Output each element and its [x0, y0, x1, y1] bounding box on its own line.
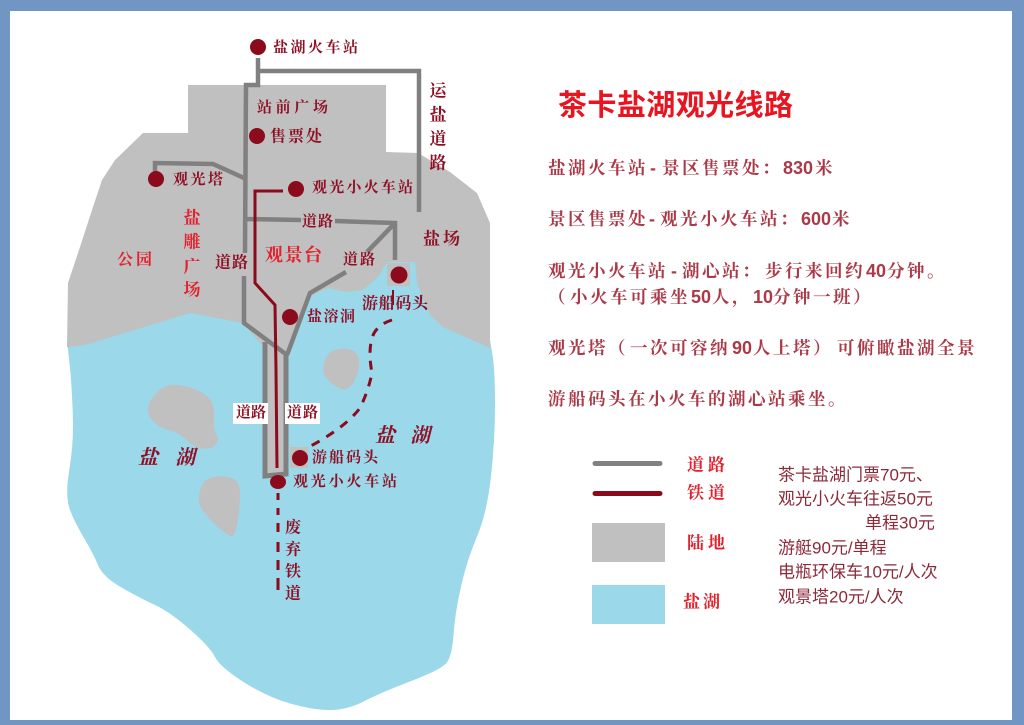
legend: land	[592, 523, 725, 562]
route information text: 830	[783, 158, 813, 178]
station dots	[148, 39, 408, 489]
map labels	[117, 38, 460, 602]
map labels: 道路	[343, 250, 375, 268]
south dock land	[290, 447, 308, 468]
map labels: 盐场	[423, 228, 460, 248]
causeway road label left: 道路	[236, 403, 266, 421]
route information text: 米	[832, 209, 852, 229]
route information text: 50	[691, 287, 711, 307]
ticket prices: 观景塔20元/人次	[778, 588, 904, 606]
ticket prices: 单程30元	[865, 514, 935, 532]
route information text: 600	[801, 209, 831, 229]
map labels: 盐 湖	[138, 446, 199, 469]
map labels: 游船码头	[312, 448, 380, 466]
map labels: 盐溶洞	[307, 307, 355, 325]
ticket prices: 观光小火车往返50元	[778, 490, 933, 508]
railway	[255, 191, 283, 468]
map labels: 场	[184, 280, 200, 300]
map labels: 盐	[184, 208, 202, 228]
island west	[148, 385, 218, 449]
route information text: 90	[732, 338, 752, 358]
map labels: 道路	[215, 252, 248, 272]
ticket prices: 电瓶环保车10元/人次	[778, 562, 938, 582]
map	[67, 38, 495, 710]
route information text: 小火车可乘坐	[570, 287, 690, 307]
map labels: 道路	[302, 212, 333, 230]
map labels: 雕	[184, 232, 200, 252]
route information text: 人上塔）	[753, 338, 833, 358]
map labels: 铁	[285, 562, 301, 580]
map labels: 游船码头	[362, 294, 430, 312]
route information text: 盐湖火车站	[548, 158, 648, 178]
island east	[323, 348, 359, 389]
route information text: 步行来回约	[765, 261, 865, 281]
map labels: 公园	[117, 250, 152, 268]
map labels: 弃	[285, 540, 301, 558]
ticket prices	[778, 466, 938, 606]
map labels: 废	[285, 518, 301, 536]
route information text: 观光小火车站	[548, 261, 668, 281]
causeway	[265, 342, 286, 476]
route information text: 米	[815, 158, 835, 178]
map labels: 道	[430, 128, 446, 148]
route information text: -	[650, 158, 656, 178]
map labels: 道	[285, 584, 301, 602]
route information text: -	[671, 261, 677, 281]
route information text: 游船码头在小火车的湖心站乘坐。	[548, 389, 848, 409]
island south-west	[199, 476, 240, 536]
causeway road label right: 道路	[287, 403, 318, 421]
boat route	[307, 320, 392, 448]
map labels: 运	[430, 82, 448, 100]
lake-centre dock land	[387, 263, 410, 286]
boat route at pier	[392, 290, 394, 305]
route information text: 分钟一班）	[773, 287, 873, 307]
route information text: （	[548, 287, 568, 307]
map labels: 盐	[430, 104, 448, 124]
lake	[67, 250, 495, 710]
route information text: 观光塔	[548, 338, 608, 358]
legend: road: 道路	[687, 454, 725, 474]
legend: road	[595, 454, 725, 474]
land	[67, 85, 490, 358]
roads	[155, 58, 419, 476]
route information text: 分钟。	[887, 261, 947, 281]
map labels: 观光小火车站	[293, 472, 397, 490]
route information text: 人，	[712, 287, 752, 308]
legend: salt lake: 盐湖	[683, 592, 720, 612]
route information text: 观光小火车站：	[660, 209, 800, 229]
map labels: 观光小火车站	[312, 178, 413, 196]
route information text: 湖心站：	[682, 261, 762, 281]
route information text: 10	[753, 287, 773, 307]
route information text: 可俯瞰盐湖全景	[837, 338, 977, 358]
ticket prices: 游艇90元/单程	[778, 538, 887, 558]
map labels: 观景台	[265, 245, 323, 265]
route information text: 景区售票处	[548, 209, 648, 229]
route information text	[548, 158, 977, 409]
map labels: 盐湖火车站	[273, 38, 358, 56]
route information text: （	[608, 338, 628, 358]
map labels: 站前广场	[257, 98, 328, 116]
causeway road label left	[233, 403, 268, 424]
legend: railway	[595, 482, 725, 502]
map labels: 观光塔	[173, 170, 223, 188]
route information text: 景区售票处：	[662, 158, 782, 178]
legend: railway: 铁道	[687, 482, 725, 502]
abandoned railway dashes	[276, 493, 280, 590]
legend	[592, 454, 725, 624]
map labels: 广	[184, 258, 200, 276]
map labels: 盐 湖	[375, 424, 434, 447]
route information text: 40	[866, 261, 886, 281]
route information text: 一次可容纳	[630, 338, 730, 358]
causeway road label right	[285, 403, 320, 424]
map labels: 售票处	[270, 126, 323, 146]
route information text: -	[649, 209, 655, 229]
legend: land: 陆地	[687, 534, 725, 552]
map labels: 路	[430, 154, 446, 172]
ticket prices: 茶卡盐湖门票70元、	[778, 466, 933, 484]
title: 茶卡盐湖观光线路	[558, 89, 793, 122]
legend: salt lake	[592, 585, 720, 624]
